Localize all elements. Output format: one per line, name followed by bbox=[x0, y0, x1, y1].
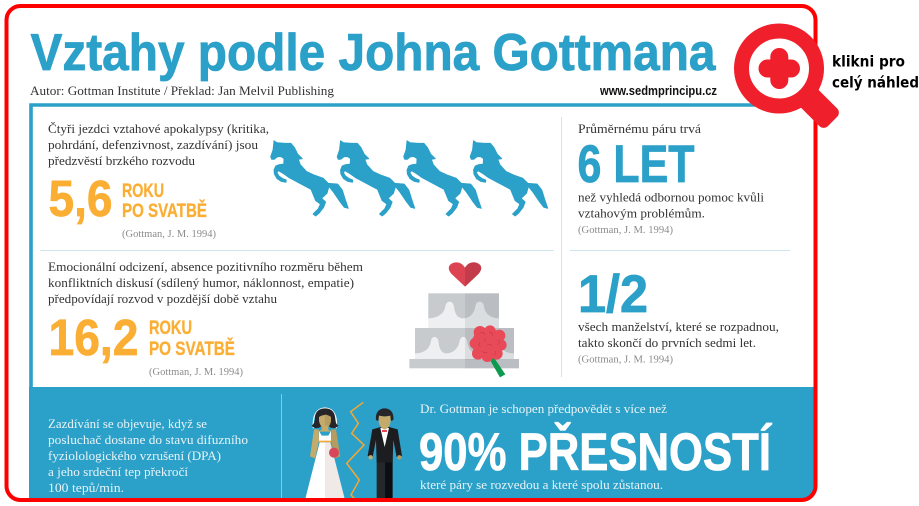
text: emotional detachment bbox=[48, 259, 363, 306]
text: before seeking help: než vyhledá odbornou pomoc kvůli bbox=[578, 190, 764, 204]
text: before seeking help bbox=[578, 190, 764, 220]
stat label: roku po svatbě: ROKU bbox=[122, 180, 164, 202]
citation: (Gottman, J. M. 1994) bbox=[578, 225, 673, 236]
icon: bride and groom split by crack bbox=[305, 402, 402, 500]
citation: (Gottman, J. M. 1994) bbox=[578, 354, 673, 366]
stat: 90% přesností: 90% PŘESNOSTÍ bbox=[419, 421, 772, 482]
stat label: roku po svatbě bbox=[122, 180, 207, 222]
text: average couple: Průměrnému páru trvá bbox=[578, 121, 701, 136]
text: stonewalling: Zazdívání se objevuje, když se bbox=[48, 416, 207, 431]
panel: one half bbox=[578, 265, 779, 366]
text: dr gottman intro: Dr. Gottman je schopen předpovědět s více než bbox=[420, 401, 667, 416]
text: emotional detachment: předpovídají rozvod v pozdější době vztahu bbox=[48, 291, 277, 306]
bride bbox=[305, 408, 345, 500]
stat label: roku po svatbě: ROKU bbox=[149, 317, 192, 339]
panel: blue footer bbox=[29, 387, 814, 500]
stat: 16,2: 16,2 bbox=[48, 309, 138, 366]
text: stonewalling: fyziolologického vzrušení (DPA) bbox=[48, 448, 221, 463]
icon: wedding cake with heart and bouquet bbox=[409, 262, 519, 377]
panel: content border bbox=[31, 105, 813, 387]
stat label: roku po svatbě bbox=[149, 317, 235, 360]
footer background bbox=[29, 387, 814, 499]
stat: 1/2: 1/2 bbox=[578, 265, 648, 324]
text: half of marriages bbox=[578, 319, 779, 350]
title: Vztahy podle Johna Gottmana bbox=[30, 24, 716, 82]
citation: (Gottman, J. M. 1994) bbox=[122, 229, 216, 240]
citation: (Gottman, J. M. 1994) bbox=[149, 367, 243, 378]
crack bbox=[347, 402, 364, 499]
text: four horsemen: předzvěstí brzkého rozvodu bbox=[48, 153, 196, 168]
panel: four horsemen bbox=[48, 121, 548, 240]
groom bbox=[368, 408, 402, 500]
panel: emotional detachment bbox=[48, 259, 519, 378]
text: half of marriages: všech manželství, které se rozpadnou, bbox=[578, 319, 779, 334]
icon: four rearing horses bbox=[271, 141, 548, 216]
author line: Autor: Gottman Institute / Překlad: Jan Melvil Publishing bbox=[30, 83, 335, 98]
text: four horsemen: pohrdání, defenzivnost, zazdívání) jsou bbox=[48, 137, 259, 152]
icon: magnifier bbox=[742, 31, 841, 130]
text: stonewalling: 100 tepů/min. bbox=[48, 480, 124, 495]
stat label: roku po svatbě: PO SVATBĚ bbox=[149, 336, 235, 360]
text: stonewalling bbox=[48, 416, 248, 495]
text: four horsemen: Čtyři jezdci vztahové apokalypsy (kritika, bbox=[48, 121, 269, 136]
callout: click for full view bbox=[832, 52, 919, 92]
text: half of marriages: takto skončí do prvních sedmi let. bbox=[578, 335, 756, 350]
callout: click for full view: klikni pro bbox=[832, 52, 905, 70]
text: four horsemen bbox=[48, 121, 269, 168]
panel: six years bbox=[578, 121, 764, 236]
text: emotional detachment: Emocionální odcizení, absence pozitivního rozměru během bbox=[48, 259, 363, 274]
text: stonewalling: a jeho srdeční tep překročí bbox=[48, 464, 188, 479]
website url: www.sedmprincipu.cz bbox=[599, 83, 717, 98]
stat label: roku po svatbě: PO SVATBĚ bbox=[122, 198, 207, 222]
text: emotional detachment: konfliktních diskusí (sdílený humor, náklonnost, empatie) bbox=[48, 275, 354, 290]
stat: 6 let: 6 LET bbox=[578, 135, 694, 194]
text: which couples: které páry se rozvedou a které spolu zůstanou. bbox=[420, 477, 663, 492]
text: stonewalling: posluchač dostane do stavu difuzního bbox=[48, 432, 248, 447]
text: before seeking help: vztahovým problémům. bbox=[578, 206, 705, 220]
stat: 5,6: 5,6 bbox=[48, 170, 112, 227]
